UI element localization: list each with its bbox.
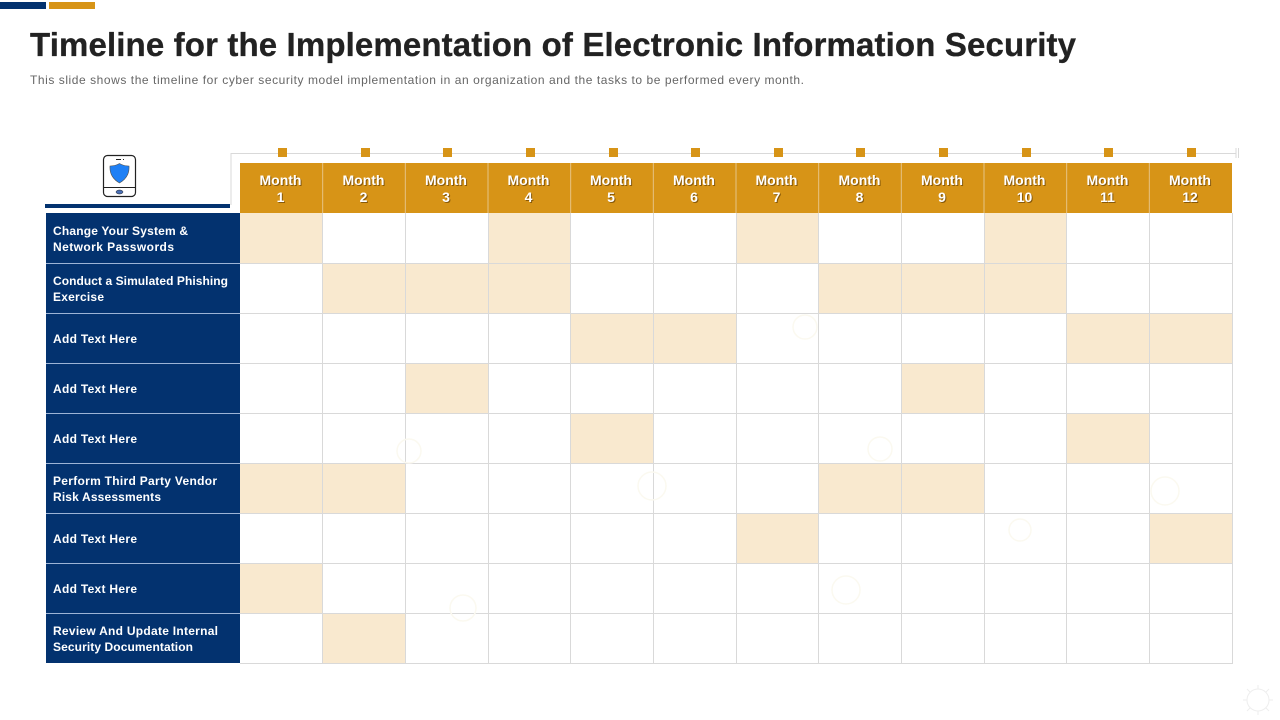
month 10 label: 10 xyxy=(1017,189,1032,205)
row 8 highlights xyxy=(240,563,323,613)
month 1 label: Month xyxy=(260,172,301,188)
month 4 label: Month xyxy=(508,172,549,188)
month 9 label: 9 xyxy=(938,189,946,205)
task 2 label: Conduct a Simulated Phishing xyxy=(53,274,228,288)
task 1 label: Change Your System & xyxy=(53,224,188,238)
month 4 label: 4 xyxy=(525,189,533,205)
task 9 label: Review And Update Internal xyxy=(53,624,218,638)
month 12 label: Month xyxy=(1169,172,1211,188)
row 4 highlights xyxy=(405,363,984,413)
month 10 label: Month xyxy=(1004,172,1045,188)
icon: phone with shield xyxy=(104,156,136,196)
task 6 label: Perform Third Party Vendor xyxy=(53,474,217,488)
title: Timeline for the Implementation of Electronic Information Security xyxy=(30,26,1077,63)
header underline xyxy=(45,204,230,208)
task 9 label xyxy=(53,624,218,654)
task 9 label: Security Documentation xyxy=(53,640,193,654)
top accent bars xyxy=(0,2,95,9)
row 7 highlights xyxy=(736,513,1232,563)
row 2 highlights xyxy=(323,263,1067,313)
task 1 label: Network Passwords xyxy=(53,240,174,254)
month 8 label: 8 xyxy=(856,189,864,205)
row 9 highlights xyxy=(323,613,405,663)
task 2 label: Exercise xyxy=(53,290,104,304)
task 3 label: Add Text Here xyxy=(53,332,137,346)
subtitle: This slide shows the timeline for cyber security model implementation in an organization and the tasks to be performed every month. xyxy=(30,73,804,87)
month 2 label: 2 xyxy=(360,189,368,205)
task 7 label: Add Text Here xyxy=(53,532,137,546)
month 7 label: Month xyxy=(756,172,797,188)
task 4 label: Add Text Here xyxy=(53,382,137,396)
month 3 label: 3 xyxy=(442,189,450,205)
month 1 label: 1 xyxy=(277,189,285,205)
task 5 label: Add Text Here xyxy=(53,432,137,446)
timeline rail with markers xyxy=(231,148,1238,205)
row 1 highlights xyxy=(240,213,1067,263)
month 5 label: Month xyxy=(590,172,632,188)
month 8 label: Month xyxy=(839,172,880,188)
month 11 label: Month xyxy=(1087,172,1128,188)
faint background watermark icons xyxy=(397,315,1179,621)
month 6 label: Month xyxy=(673,172,715,188)
month 2 label: Month xyxy=(343,172,384,188)
task 1 label xyxy=(53,224,188,254)
month 5 label: 5 xyxy=(607,189,615,205)
month 3 label: Month xyxy=(425,172,467,188)
month 9 label: Month xyxy=(921,172,963,188)
task 6 label xyxy=(53,474,217,504)
task label column xyxy=(46,213,240,663)
month 12 label: 12 xyxy=(1182,189,1198,205)
row 6 highlights xyxy=(240,463,984,513)
month 11 label: 11 xyxy=(1100,189,1115,205)
task 2 label xyxy=(53,274,228,304)
month 7 label: 7 xyxy=(773,189,781,205)
month header row xyxy=(240,163,1232,213)
task 6 label: Risk Assessments xyxy=(53,490,161,504)
schedule grid: highlighted months xyxy=(240,213,1232,663)
row 5 highlights xyxy=(571,413,1149,463)
task 8 label: Add Text Here xyxy=(53,582,137,596)
icon: faint gear watermark xyxy=(1243,685,1273,715)
row 3 highlights xyxy=(571,313,1232,363)
month 6 label: 6 xyxy=(690,189,698,205)
